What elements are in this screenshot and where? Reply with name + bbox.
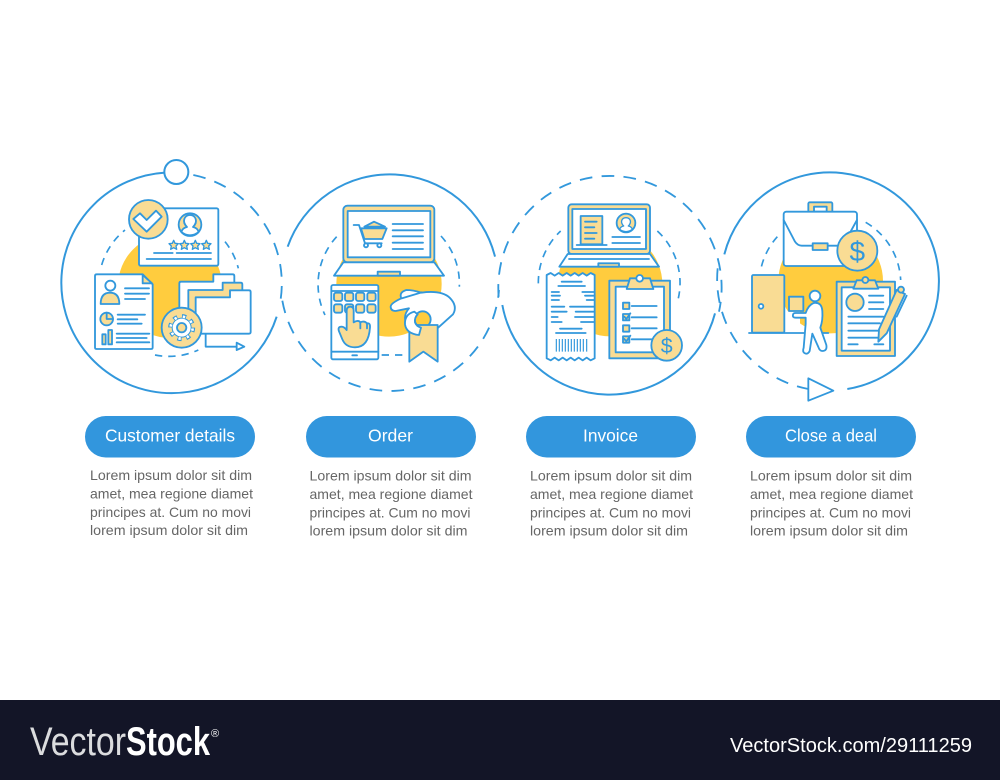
step 4 label pill [746,416,916,458]
yellow backdrop [118,234,222,338]
step 1 label pill: Customer details [105,426,235,446]
step 3 description: principes at. Cum no movi [530,504,691,520]
step 1 description: principes at. Cum no movi [90,504,251,520]
icon: contract with pen [837,277,907,356]
solid ring arc [61,173,277,393]
step 3 description: amet, mea regione diamet [530,486,693,502]
panel: close a deal circle [717,172,939,401]
step 2 description [310,468,473,538]
dashed ring arc [498,176,722,312]
step 3 label pill [526,416,696,458]
icon: checklist clipboard [609,275,670,358]
step 2 description: Lorem ipsum dolor sit dim [310,468,472,484]
yellow backdrop [336,231,442,337]
step 4 description: Lorem ipsum dolor sit dim [750,468,912,484]
step 4 label pill: Close a deal [785,426,877,446]
icon: hand holding tag [391,290,455,362]
step 4 description: principes at. Cum no movi [750,504,911,520]
step 1 description [90,467,253,538]
thumb [405,312,421,335]
icon: laptop with cart [334,206,444,276]
step 2 label pill: Order [368,426,413,446]
icon: phone with tapping hand [331,285,378,359]
step 3 label pill: Invoice [583,426,638,446]
logo wordmark: ® [211,728,219,740]
icon: folders [179,274,251,334]
step 4 description [750,468,913,538]
step 3 description: Lorem ipsum dolor sit dim [530,468,692,484]
step 1 description: amet, mea regione diamet [90,486,253,502]
panel: customer details circle [61,160,282,393]
yellow backdrop [558,232,662,336]
step 1 label pill [85,416,255,458]
dashed ring arc [717,268,808,389]
step 3 description [530,468,693,538]
icon: briefcase [784,202,857,266]
icon: dollar coin [837,231,877,271]
logo wordmark [30,720,219,764]
step 2 description: lorem ipsum dolor sit dim [310,522,468,538]
watermark footer bar [0,700,1000,780]
step 3 description: lorem ipsum dolor sit dim [530,522,688,538]
icon: laptop with profile [559,204,659,267]
yellow backdrop [778,229,883,333]
logo wordmark: Stock [126,720,211,764]
logo wordmark: Vector [30,720,126,764]
panel: invoice circle [498,176,722,395]
step 4 description: lorem ipsum dolor sit dim [750,522,908,538]
solid ring arc [288,174,495,257]
inner dashed arcs [761,222,901,280]
step 4 description: amet, mea regione diamet [750,486,913,502]
icon: person carrying box [789,291,826,354]
inner dashed arcs [102,230,238,356]
solid ring arc [724,172,939,389]
icon: profile rating card [129,200,218,266]
inner dashed arcs [538,231,680,298]
solid ring arc [502,305,715,395]
arrow head [808,378,833,401]
icon: profile document [95,274,153,349]
icon: dollar coin: $ [850,236,866,267]
step 2 description: principes at. Cum no movi [310,504,470,520]
dashed ring arc [282,290,499,391]
inner dashed arcs [318,236,459,355]
panel: order circle [282,174,499,391]
icon: receipt [547,273,595,360]
step 1 description: lorem ipsum dolor sit dim [90,522,248,538]
step 2 description: amet, mea regione diamet [310,486,473,502]
step 1 description: Lorem ipsum dolor sit dim [90,467,252,483]
icon: dollar coin: $ [661,334,673,358]
icon: door [749,275,828,333]
image id: VectorStock.com/29111259 [730,735,972,757]
step 2 label pill [306,416,476,458]
dashed ring arc [193,175,282,303]
start node circle [164,160,188,184]
icon: dollar coin [651,330,682,361]
icon: gear [162,308,202,348]
icon: arrow from folders [206,334,244,350]
